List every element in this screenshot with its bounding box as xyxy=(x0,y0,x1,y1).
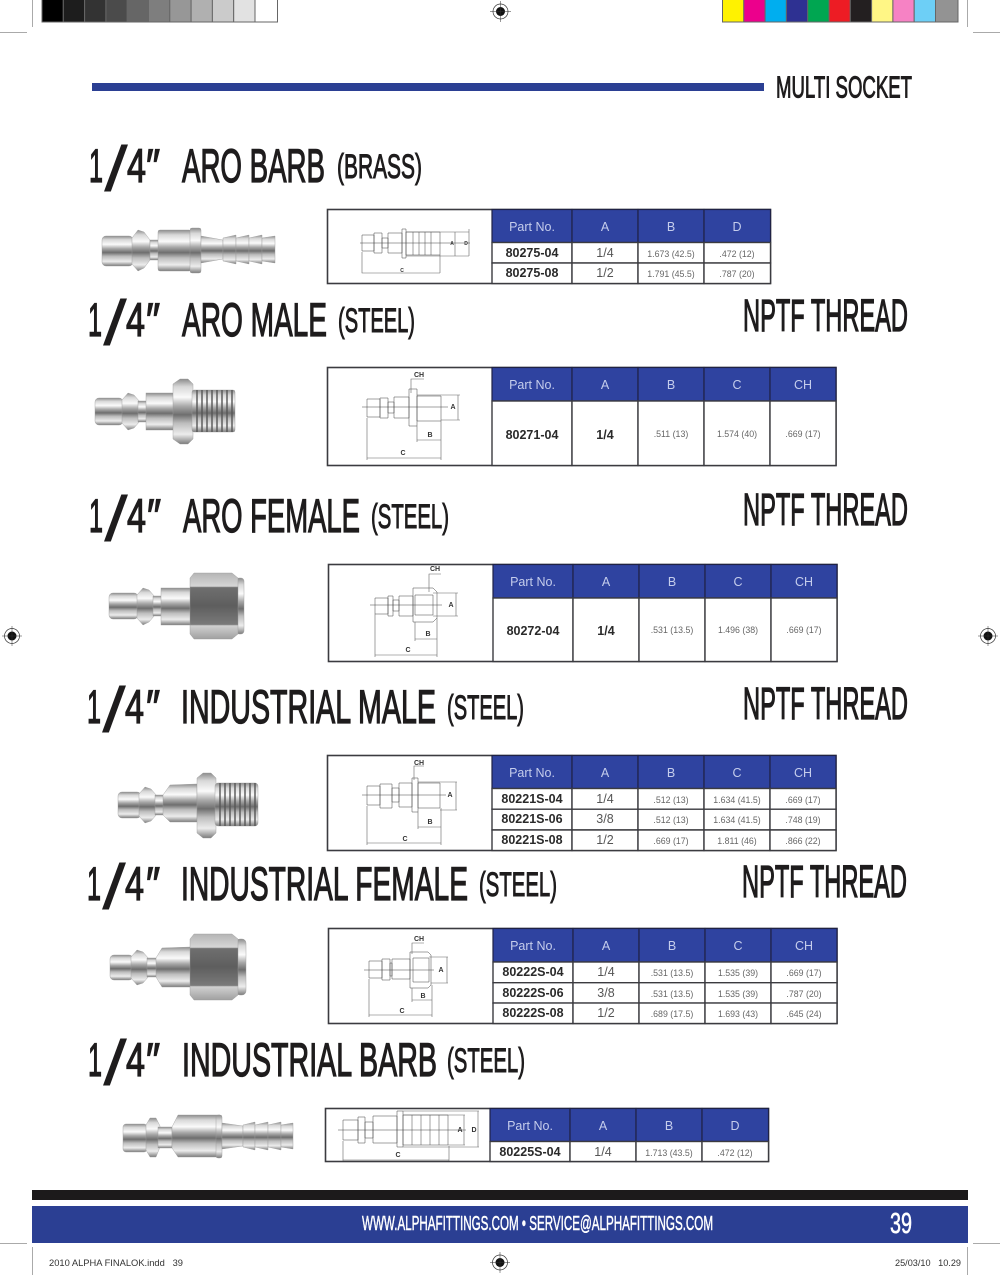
technical drawing: aro male: B xyxy=(427,432,433,439)
table header row: CH xyxy=(794,378,812,392)
table data row: 1.713 (43.5) xyxy=(645,1148,693,1158)
table header row: CH xyxy=(794,766,812,780)
table data rows: 80222S-06 xyxy=(502,986,564,1000)
table data rows: 1.791 (45.5) xyxy=(647,269,695,279)
table data rows: .787 (20) xyxy=(719,269,755,279)
table data row: .531 (13.5) xyxy=(651,625,693,635)
title: aro male: / xyxy=(103,287,127,359)
technical drawing: industrial male: CH xyxy=(414,760,424,767)
table data row: 80225S-04 xyxy=(499,1145,561,1159)
table data row: 1/4 xyxy=(596,428,614,442)
table header row: B xyxy=(667,378,675,392)
table data rows: 1/4 xyxy=(597,965,615,979)
title: aro male: 1 xyxy=(88,293,102,346)
title: aro female: 1 xyxy=(89,489,103,542)
table data rows xyxy=(492,242,770,284)
technical drawing: industrial barb xyxy=(338,1111,479,1161)
table header row xyxy=(492,756,836,788)
table header row xyxy=(492,368,836,401)
technical drawing: aro barb: D xyxy=(464,241,468,247)
table data row: 1.574 (40) xyxy=(717,429,757,439)
technical drawing: industrial female: CH xyxy=(414,936,424,943)
photo: industrial barb fitting xyxy=(123,1115,293,1158)
photo: industrial female fitting xyxy=(110,934,246,1000)
title: aro female: / xyxy=(104,483,128,555)
technical drawing: industrial male: B xyxy=(427,819,433,826)
title: aro male: 4 xyxy=(126,293,145,346)
table data rows: 1.693 (43) xyxy=(718,1009,758,1019)
technical drawing: aro barb: C xyxy=(400,268,404,274)
table header row: B xyxy=(668,939,676,953)
technical drawing: industrial barb: A xyxy=(457,1127,463,1134)
footer black bar xyxy=(32,1190,968,1200)
table header row xyxy=(492,210,770,242)
title: industrial barb: INDUSTRIAL BARB xyxy=(182,1033,437,1086)
spec table: industrial female xyxy=(328,928,837,1024)
title: industrial male: / xyxy=(102,674,126,746)
table data rows: .866 (22) xyxy=(785,836,821,846)
photo: aro barb fitting xyxy=(102,228,275,273)
table data row: .511 (13) xyxy=(654,429,688,439)
registration mark right xyxy=(978,626,998,646)
table header row: C xyxy=(733,575,743,589)
table data row xyxy=(490,1142,768,1162)
table header row: Part No. xyxy=(510,575,556,589)
section: industrial female xyxy=(87,851,907,1024)
title: aro male: ″ xyxy=(146,293,160,346)
table data rows: .669 (17) xyxy=(785,795,821,805)
table data rows: .787 (20) xyxy=(786,989,822,999)
section: aro female xyxy=(89,483,908,662)
table header row: A xyxy=(601,378,610,392)
technical drawing: industrial female: B xyxy=(420,993,426,1000)
technical drawing: industrial female xyxy=(364,936,448,1017)
table header row xyxy=(493,564,837,598)
table data rows: .472 (12) xyxy=(719,249,755,259)
technical drawing: industrial male xyxy=(362,760,457,845)
spec table: aro male xyxy=(328,368,836,466)
technical drawing: aro female: C xyxy=(405,647,411,654)
table data rows: .689 (17.5) xyxy=(651,1009,693,1019)
title: aro barb: ARO BARB xyxy=(182,139,325,192)
table data row xyxy=(493,598,837,662)
title: industrial barb: 1 xyxy=(88,1033,102,1086)
table header row: B xyxy=(668,575,676,589)
title: industrial female: INDUSTRIAL FEMALE xyxy=(181,857,468,910)
title: industrial barb: / xyxy=(103,1027,127,1099)
title: aro female: ARO FEMALE xyxy=(183,489,360,542)
table data rows: 1.673 (42.5) xyxy=(647,249,695,259)
table data rows: 80275-08 xyxy=(506,266,558,280)
table header row: C xyxy=(732,766,742,780)
title: aro barb: 1 xyxy=(89,139,103,192)
print slug: file name: 2010 ALPHA FINALOK.indd 39 xyxy=(49,1258,183,1269)
table data rows: 3/8 xyxy=(596,812,614,826)
table header row xyxy=(493,928,837,962)
technical drawing: industrial male: C xyxy=(402,836,408,843)
technical drawing: industrial female: A xyxy=(438,967,444,974)
title: aro barb: (BRASS) xyxy=(337,148,422,186)
table data row: 1.496 (38) xyxy=(718,625,758,635)
technical drawing: aro barb: A xyxy=(450,241,454,247)
registration mark top xyxy=(490,1,511,22)
title: aro female xyxy=(89,483,449,555)
page number: 39 xyxy=(890,1208,912,1240)
technical drawing: aro male: CH xyxy=(414,372,424,379)
table header row: CH xyxy=(795,939,813,953)
technical drawing: industrial male: A xyxy=(447,792,453,799)
table header row: C xyxy=(733,939,743,953)
table data row: .472 (12) xyxy=(717,1148,753,1158)
table data rows: .748 (19) xyxy=(785,815,821,825)
table header row: Part No. xyxy=(509,220,555,234)
title: aro barb xyxy=(89,133,422,205)
table data row: 1/4 xyxy=(597,624,615,638)
table header row: B xyxy=(667,766,675,780)
title: aro barb: ″ xyxy=(146,139,160,192)
title: industrial barb: (STEEL) xyxy=(447,1042,525,1080)
spec table: aro barb xyxy=(328,210,770,284)
section: aro male xyxy=(88,287,908,466)
table data rows xyxy=(492,788,836,850)
technical drawing: aro female: A xyxy=(448,602,454,609)
footer contact text: WWW.ALPHAFITTINGS.COM • SERVICE@ALPHAFITTINGS.COM xyxy=(362,1212,713,1235)
spec table: industrial barb xyxy=(326,1108,768,1162)
section: industrial barb xyxy=(88,1027,768,1162)
table data rows: 1.535 (39) xyxy=(718,968,758,978)
table header row: Part No. xyxy=(510,939,556,953)
table data rows: 1.634 (41.5) xyxy=(713,795,761,805)
table header row: A xyxy=(601,766,610,780)
table data rows: 1/4 xyxy=(596,792,614,806)
table data rows: 3/8 xyxy=(597,986,615,1000)
title: industrial male: ″ xyxy=(146,680,160,733)
grayscale colour bar xyxy=(42,0,278,22)
title: industrial barb xyxy=(88,1027,525,1099)
table data row: 1/4 xyxy=(594,1145,612,1159)
technical drawing: industrial female: C xyxy=(399,1008,405,1015)
title: aro female: ″ xyxy=(147,489,161,542)
table data rows: .512 (13) xyxy=(653,795,689,805)
table data rows: 80221S-04 xyxy=(501,792,563,806)
title: industrial female xyxy=(87,851,557,923)
table header row: A xyxy=(602,575,611,589)
table data rows: 80222S-04 xyxy=(502,965,564,979)
table data rows: .531 (13.5) xyxy=(651,968,693,978)
table data rows: 80221S-06 xyxy=(501,812,563,826)
table header row: B xyxy=(665,1119,673,1133)
registration mark bottom xyxy=(490,1252,510,1273)
title: aro male: ARO MALE xyxy=(182,293,327,346)
title: aro female: (STEEL) xyxy=(371,498,449,536)
title: industrial barb: ″ xyxy=(146,1033,160,1086)
title: industrial male: 1 xyxy=(87,680,101,733)
table header row xyxy=(490,1108,768,1142)
process colour bar xyxy=(722,0,958,22)
title: industrial female: (STEEL) xyxy=(479,866,557,904)
title: industrial female: / xyxy=(102,851,126,923)
footer blue band xyxy=(32,1206,968,1243)
table data rows: .531 (13.5) xyxy=(651,989,693,999)
table header row: D xyxy=(730,1119,740,1133)
title: industrial female: 1 xyxy=(87,857,101,910)
title: aro female: 4 xyxy=(127,489,146,542)
table header row: Part No. xyxy=(507,1119,553,1133)
title: industrial female: 4 xyxy=(125,857,144,910)
table header row: A xyxy=(599,1119,608,1133)
photo: aro male fitting xyxy=(95,379,235,444)
table header row: B xyxy=(667,220,675,234)
table data row: 80272-04 xyxy=(507,624,559,638)
title: industrial male: (STEEL) xyxy=(447,689,524,727)
table header row: D xyxy=(732,220,742,234)
table data row: .669 (17) xyxy=(786,625,822,635)
table data rows: 1/2 xyxy=(596,266,614,280)
table header row: CH xyxy=(795,575,813,589)
technical drawing: aro male xyxy=(362,372,460,460)
table data rows: 1/4 xyxy=(596,246,614,260)
title: aro barb: / xyxy=(104,133,128,205)
table data rows xyxy=(493,962,837,1024)
title: industrial female: ″ xyxy=(146,857,160,910)
table header row: C xyxy=(732,378,742,392)
table data rows: .645 (24) xyxy=(786,1009,822,1019)
table header row: A xyxy=(602,939,611,953)
table data rows: .512 (13) xyxy=(653,815,689,825)
table header row: A xyxy=(601,220,610,234)
table data rows: 1.535 (39) xyxy=(718,989,758,999)
table data rows: 1/2 xyxy=(596,833,614,847)
technical drawing: aro male: C xyxy=(400,450,406,457)
title: industrial barb: 4 xyxy=(126,1033,145,1086)
table header row: Part No. xyxy=(509,378,555,392)
table data rows: 1.634 (41.5) xyxy=(713,815,761,825)
table data rows: 1.811 (46) xyxy=(717,836,757,846)
print slug: date: 25/03/10 10.29 xyxy=(895,1258,961,1269)
table data rows: .669 (17) xyxy=(653,836,689,846)
spec table: aro female xyxy=(328,564,837,662)
section: industrial male xyxy=(87,674,908,850)
table data rows: 80221S-08 xyxy=(501,833,563,847)
title: industrial male: 4 xyxy=(125,680,144,733)
photo: aro female fitting xyxy=(109,573,244,639)
title: industrial male xyxy=(87,674,524,746)
table data rows: .669 (17) xyxy=(786,968,822,978)
title: aro male xyxy=(88,287,415,359)
spec table: industrial male xyxy=(328,756,836,850)
technical drawing: aro female xyxy=(370,566,458,657)
table data row xyxy=(492,401,836,466)
table data rows: 1/2 xyxy=(597,1006,615,1020)
technical drawing: aro barb xyxy=(360,229,470,274)
technical drawing: aro female: CH xyxy=(430,566,440,573)
section heading: multi socket: MULTI SOCKET xyxy=(776,70,912,104)
technical drawing: industrial barb: C xyxy=(395,1152,401,1159)
header rule xyxy=(92,83,764,91)
technical drawing: aro male: A xyxy=(450,404,456,411)
table header row: Part No. xyxy=(509,766,555,780)
title: aro barb: 4 xyxy=(127,139,146,192)
table data rows: 80222S-08 xyxy=(502,1006,564,1020)
table data rows: 80275-04 xyxy=(506,246,558,260)
table data row: 80271-04 xyxy=(506,428,558,442)
title: aro male: (STEEL) xyxy=(338,302,415,340)
title: industrial male: INDUSTRIAL MALE xyxy=(181,680,436,733)
photo: industrial male fitting xyxy=(118,773,258,838)
technical drawing: aro female: B xyxy=(425,631,431,638)
registration mark left xyxy=(2,626,22,646)
technical drawing: industrial barb: D xyxy=(471,1127,477,1134)
table data row: .669 (17) xyxy=(785,429,821,439)
section: aro barb xyxy=(89,133,770,284)
